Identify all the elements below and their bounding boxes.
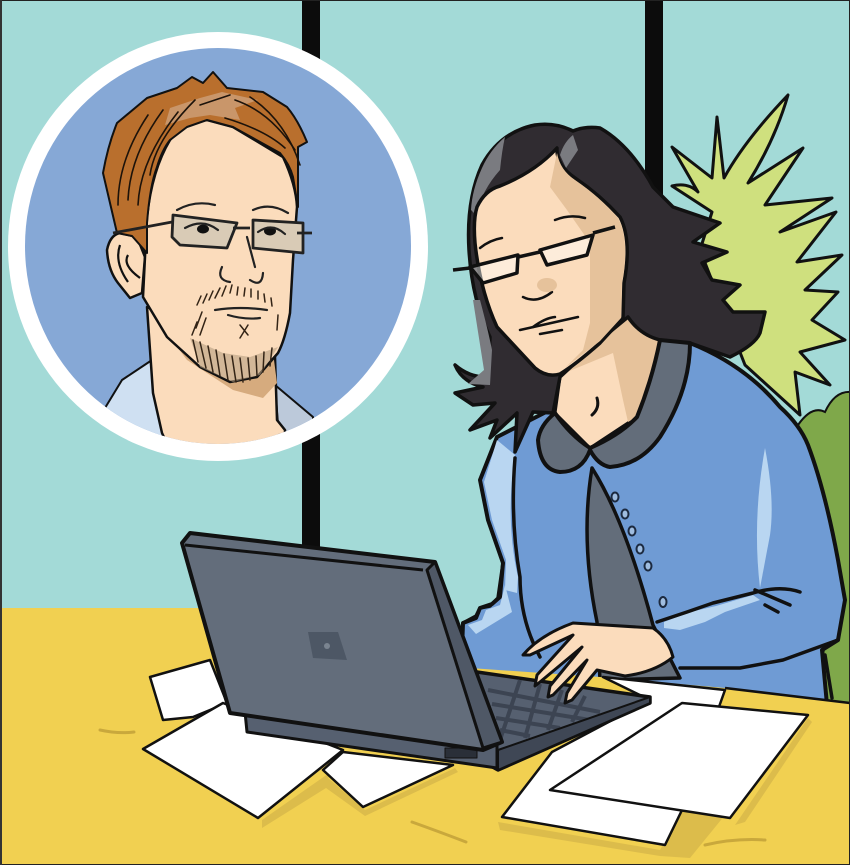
glasses	[113, 215, 312, 253]
collar	[538, 340, 690, 472]
ear	[107, 233, 145, 298]
logo dot	[324, 643, 330, 649]
shirt	[104, 360, 164, 436]
eyes	[197, 224, 276, 236]
hair	[455, 124, 765, 452]
glasses	[453, 227, 615, 283]
buttons	[612, 492, 666, 607]
necklace mark	[592, 398, 598, 415]
beard	[192, 285, 278, 382]
inner top	[587, 468, 680, 680]
woman	[453, 124, 845, 705]
papers	[143, 660, 808, 845]
cardigan lines	[463, 458, 838, 698]
hair highlight	[165, 92, 258, 125]
laptop lid	[182, 533, 502, 750]
laptop hinge	[245, 712, 497, 768]
desk shadows	[262, 718, 812, 858]
beard tone	[190, 338, 278, 382]
neck and chest	[545, 310, 662, 448]
hair strands	[118, 95, 300, 205]
face	[143, 120, 297, 382]
cardigan highlights	[468, 440, 772, 634]
portrait figure	[103, 72, 313, 450]
face shade	[550, 153, 625, 368]
base front edge	[498, 697, 650, 770]
neck shade	[567, 318, 660, 422]
inset background	[25, 48, 411, 444]
laptop	[182, 533, 673, 770]
port	[445, 748, 477, 758]
inset ring	[8, 32, 428, 461]
window frames	[302, 0, 663, 549]
laptop base	[477, 672, 650, 770]
eyelids and eyebrows	[177, 203, 288, 319]
hair	[103, 72, 307, 253]
shirt right	[277, 386, 314, 434]
portrait inset	[8, 32, 428, 461]
neck	[147, 307, 285, 450]
bush: dark green	[798, 392, 850, 720]
lid side	[427, 562, 502, 748]
lid logo	[308, 632, 347, 660]
desk marks	[100, 730, 765, 845]
keyboard	[488, 680, 600, 740]
desk	[0, 608, 850, 865]
face features	[480, 216, 585, 334]
neck shadow	[179, 350, 277, 398]
plant: light green spiky	[672, 95, 845, 415]
lid top edge line	[185, 545, 423, 570]
ear detail	[118, 245, 140, 282]
cardigan body	[460, 343, 845, 705]
left edge line	[0, 0, 2, 865]
hand	[523, 623, 673, 703]
nose shade	[537, 278, 557, 292]
desk edge lines	[725, 688, 850, 703]
hair highlights	[468, 135, 578, 385]
face	[474, 148, 627, 375]
